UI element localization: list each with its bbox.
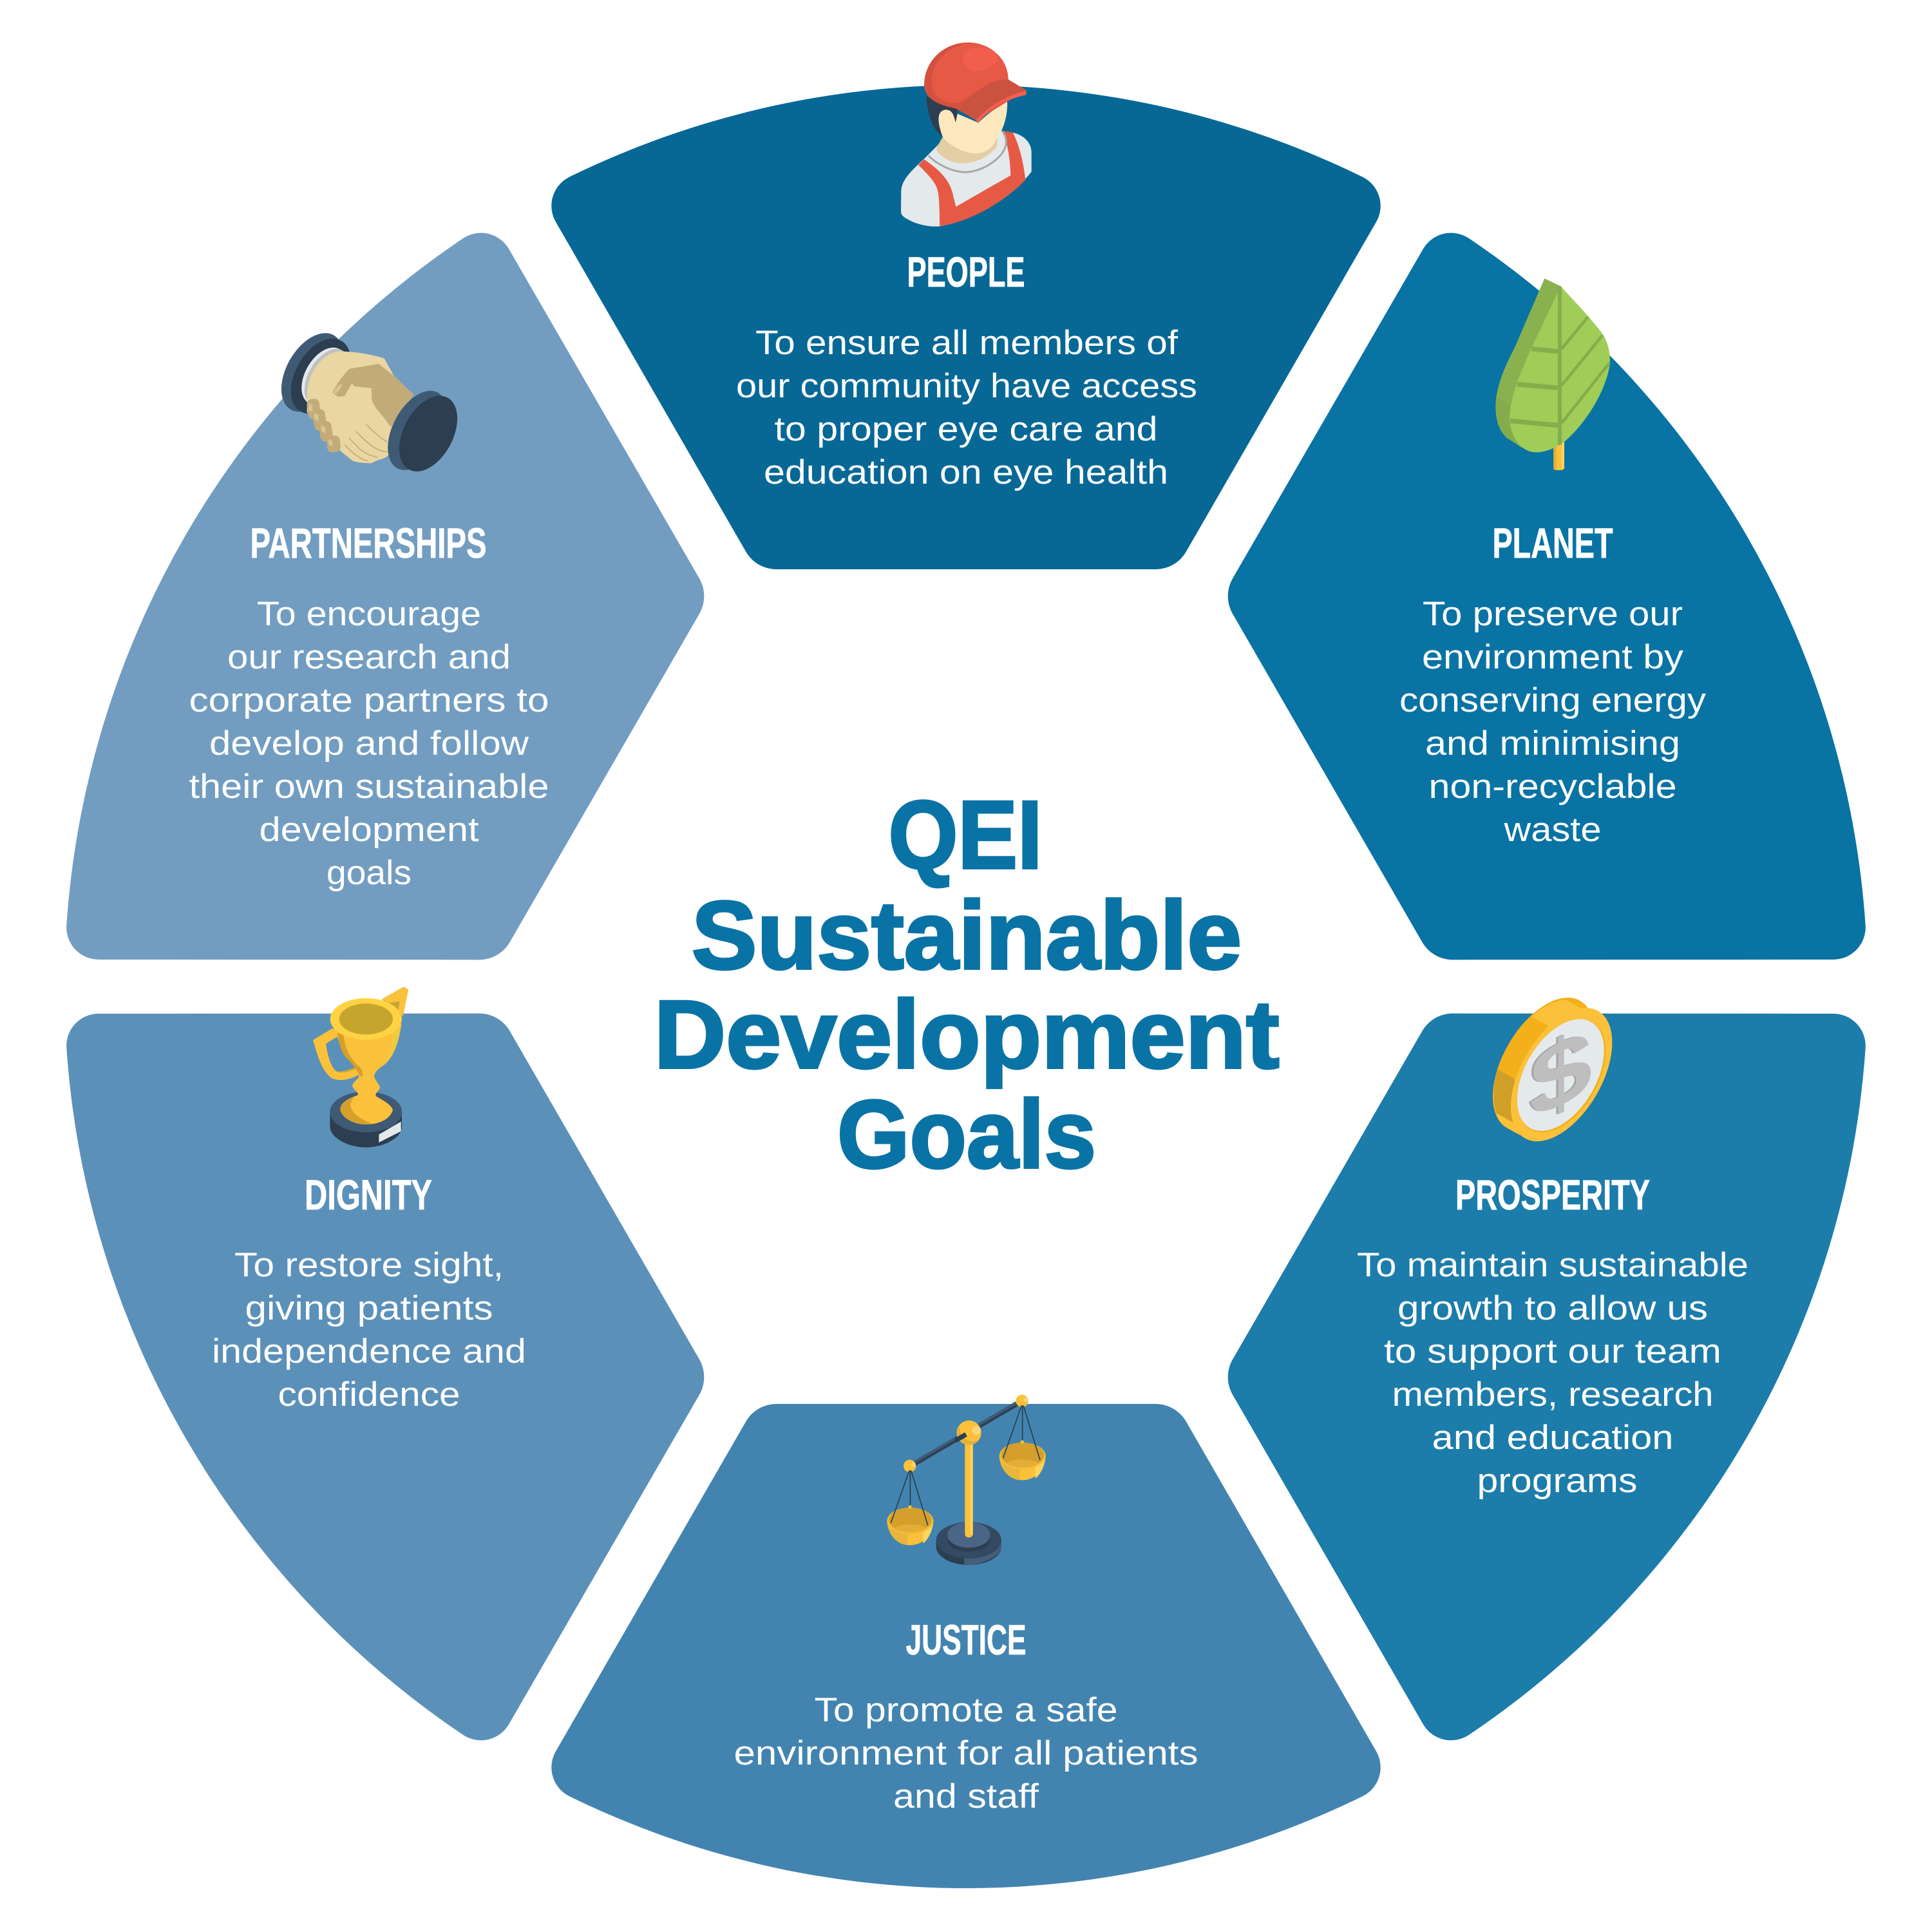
text block: planet [1399, 595, 1707, 849]
heading: prosperity: PROSPERITY [1455, 1171, 1650, 1218]
segment shape: partnerships [0, 177, 812, 1137]
text block: partnerships: development [259, 811, 479, 849]
text block: partnerships: To encourage [257, 595, 481, 633]
icon: dollar coin [1472, 981, 1633, 1159]
title [654, 781, 1279, 1188]
title: Goals [837, 1080, 1096, 1188]
segment shape: planet [1120, 177, 1932, 1137]
text block: partnerships: their own sustainable [189, 768, 549, 806]
text block: prosperity: To maintain sustainable [1357, 1246, 1748, 1284]
text block: planet: environment by [1422, 638, 1684, 676]
panel: partnerships [0, 177, 812, 1137]
text block: people: our community have access [736, 367, 1197, 405]
icon: worker with red cap [901, 43, 1032, 227]
icon: handshake [269, 323, 469, 481]
panel: dignity [0, 837, 812, 1796]
text block: partnerships: goals [327, 854, 412, 892]
panel: planet [1120, 177, 1932, 1137]
title: QEI [889, 781, 1042, 889]
segment shape: prosperity [1120, 837, 1932, 1796]
segment shape: dignity [0, 837, 812, 1796]
heading: dignity: DIGNITY [305, 1171, 432, 1218]
icon: green leaf [1495, 278, 1610, 470]
text block: planet: waste [1503, 811, 1601, 849]
panel: prosperity [1120, 837, 1932, 1796]
title: Sustainable [692, 881, 1242, 989]
text block: dignity: To restore sight, [234, 1246, 504, 1284]
text block: planet: non-recyclable [1428, 768, 1677, 806]
icon: dollar coin: $ [1528, 1005, 1591, 1142]
text block: justice: To promote a safe [814, 1691, 1118, 1729]
icon: dollar coin: $ [1530, 1005, 1593, 1142]
panel: justice [551, 1395, 1381, 1888]
text block: people: education on eye health [764, 453, 1168, 491]
panel: people [551, 43, 1381, 569]
icon: gold trophy [313, 987, 408, 1148]
heading: planet: PLANET [1493, 519, 1613, 567]
text block: dignity [212, 1246, 526, 1414]
text block: planet: conserving energy [1399, 681, 1707, 719]
text block: prosperity [1357, 1246, 1748, 1500]
text block: prosperity: growth to allow us [1397, 1289, 1708, 1327]
heading: people: PEOPLE [907, 248, 1025, 296]
text block: partnerships: our research and [227, 638, 511, 676]
text block: dignity: independence and [212, 1332, 526, 1370]
text block: dignity: giving patients [245, 1289, 493, 1327]
text block: partnerships: develop and follow [209, 724, 529, 762]
text block: justice: and staff [893, 1777, 1039, 1815]
heading: justice: JUSTICE [905, 1616, 1027, 1663]
text block: prosperity: to support our team [1384, 1332, 1721, 1370]
heading: partnerships: PARTNERSHIPS [250, 519, 487, 567]
text block: planet: To preserve our [1423, 595, 1683, 633]
text block: prosperity: programs [1477, 1462, 1637, 1500]
text block: planet: and minimising [1425, 724, 1680, 762]
text block: prosperity: and education [1432, 1419, 1673, 1457]
text block: people: to proper eye care and [774, 410, 1158, 448]
text block: justice: environment for all patients [734, 1734, 1198, 1772]
segment shape: justice [551, 1404, 1381, 1888]
text block: dignity: confidence [278, 1376, 460, 1414]
icon: balance scales [887, 1395, 1046, 1565]
title: Development [654, 980, 1279, 1088]
text block: people: To ensure all members of [755, 324, 1178, 362]
segment shape: people [551, 85, 1381, 569]
text block: justice [734, 1691, 1198, 1815]
text block: partnerships [189, 595, 549, 892]
text block: people [736, 324, 1197, 491]
text block: prosperity: members, research [1392, 1376, 1713, 1414]
text block: partnerships: corporate partners to [189, 681, 549, 719]
